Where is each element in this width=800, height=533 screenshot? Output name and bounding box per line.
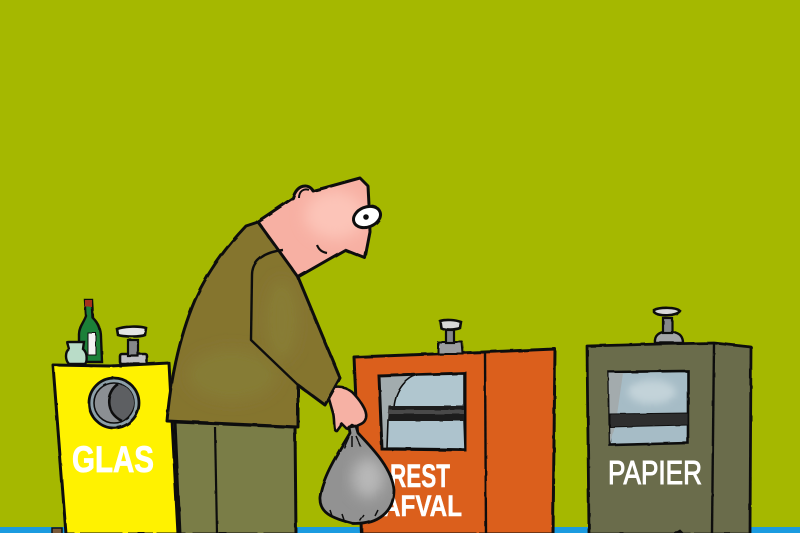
knob on rest bin: [438, 320, 463, 354]
green bottle: [79, 300, 102, 362]
trousers: [175, 422, 296, 533]
orange bin body: [354, 349, 555, 533]
blue ground strip: [0, 527, 800, 533]
garbage bag: [320, 426, 394, 524]
paper window: [609, 371, 688, 445]
label: REST: REST: [390, 458, 450, 494]
illustration: man recycling at three bins: [0, 176, 800, 533]
paper bin: [587, 308, 751, 533]
glass bin: [53, 300, 178, 533]
label: AFVAL: AFVAL: [383, 490, 462, 523]
hand: [327, 387, 366, 431]
eye: [350, 202, 384, 232]
man: [167, 178, 394, 533]
yellow bin body: [53, 363, 178, 533]
glass jar: [66, 342, 87, 364]
head: [257, 178, 384, 277]
knob on glass bin: [117, 327, 147, 364]
window: [379, 373, 465, 450]
bottles at foot of glass bin: [52, 525, 108, 533]
sleeve seam: [251, 250, 298, 385]
rest waste bin: [354, 320, 555, 533]
grey bin body: [587, 343, 751, 533]
mouth: [317, 245, 327, 253]
porthole: [89, 378, 139, 428]
jacket: [167, 222, 340, 427]
ear: [299, 189, 309, 198]
knob on paper bin: [654, 308, 683, 343]
label: PAPIER: PAPIER: [608, 454, 702, 491]
label: GLAS: GLAS: [72, 439, 154, 480]
